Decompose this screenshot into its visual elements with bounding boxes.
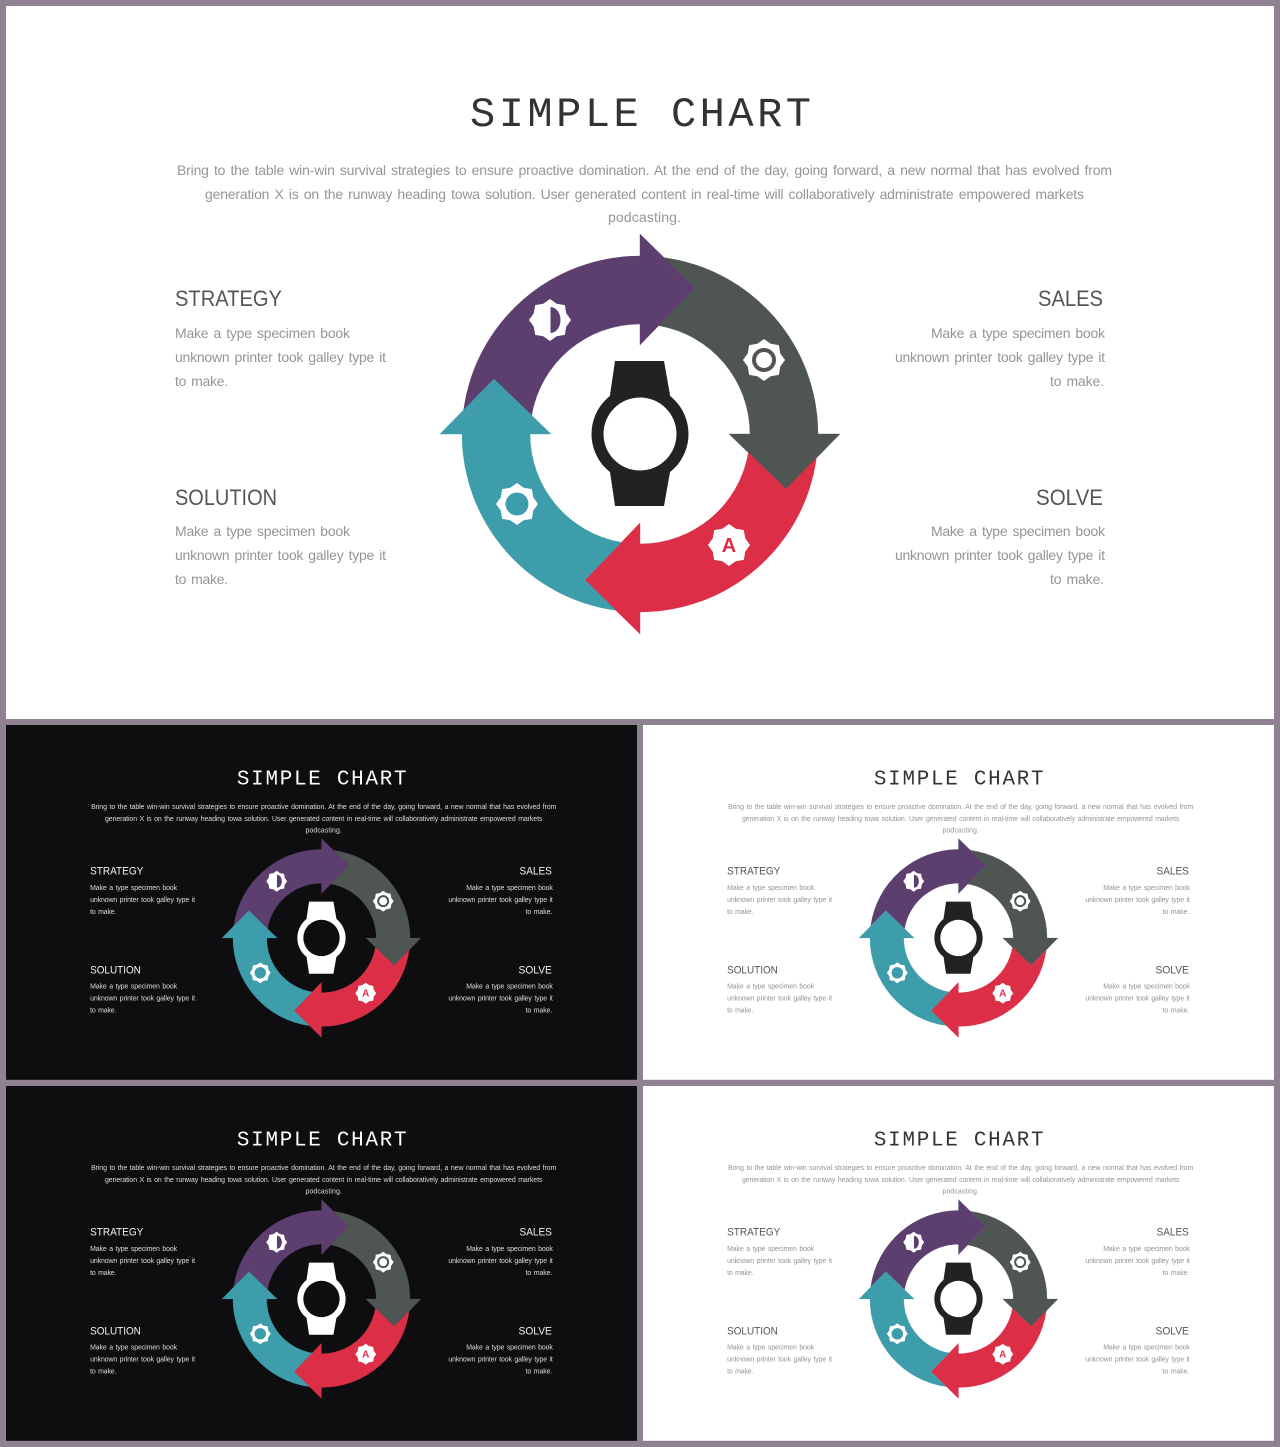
text block: solve: to make. <box>1050 571 1104 587</box>
intro paragraph: generation X is on the runway heading towa solution. User generated content in real-time will collaboratively administrate empowered markets <box>105 1177 543 1184</box>
chart: circular arrows <box>859 1199 1058 1398</box>
text block: strategy: Make a type specimen book <box>175 325 351 341</box>
chart: circular arrows <box>222 838 421 1037</box>
intro paragraph <box>728 804 1194 834</box>
text block: solve: SOLVE <box>1156 964 1189 976</box>
text block: solve <box>448 964 553 1015</box>
text block: solve <box>1085 1325 1190 1376</box>
icon: brightness auto: A <box>362 1350 369 1361</box>
intro paragraph <box>177 162 1112 225</box>
intro paragraph <box>91 1165 557 1195</box>
text block: strategy: STRATEGY <box>90 865 144 877</box>
text block: strategy: STRATEGY <box>90 1226 144 1238</box>
icon: watch <box>297 902 346 974</box>
text block: strategy <box>175 286 386 389</box>
text block: sales <box>448 865 553 916</box>
icon: brightness auto <box>355 983 376 1004</box>
text block: solve <box>1085 964 1190 1015</box>
icon: brightness auto: A <box>999 1350 1006 1361</box>
text block: solve: Make a type specimen book <box>466 984 553 991</box>
text block: solution: to make. <box>90 1369 117 1376</box>
text block: strategy <box>727 1226 832 1277</box>
text block: solve: Make a type specimen book <box>931 523 1106 539</box>
panel: small dark slide top <box>6 725 637 1080</box>
intro paragraph: podcasting. <box>943 1188 979 1195</box>
text block: sales: Make a type specimen book <box>931 325 1106 341</box>
text block: solve: SOLVE <box>519 1325 552 1337</box>
intro paragraph: podcasting. <box>306 1188 342 1195</box>
intro paragraph <box>91 804 557 834</box>
text block: solution: Make a type specimen book <box>90 1345 178 1352</box>
text block: strategy: to make. <box>727 909 754 916</box>
text block: solution: Make a type specimen book <box>727 984 815 991</box>
intro paragraph: podcasting. <box>306 827 342 834</box>
text block: solve: unknown printer took galley type it <box>448 996 553 1003</box>
text block: solution: unknown printer took galley type it <box>727 996 832 1003</box>
intro paragraph <box>728 1165 1194 1195</box>
text block: solve: unknown printer took galley type it <box>448 1357 553 1364</box>
intro paragraph: generation X is on the runway heading towa solution. User generated content in real-time will collaboratively administrate empowered markets <box>742 1177 1180 1184</box>
intro paragraph: Bring to the table win-win survival strategies to ensure proactive domination. At the end of the day, going forward, a new normal that has evolved from <box>177 162 1112 178</box>
text block: strategy: STRATEGY <box>727 1226 781 1238</box>
icon: brightness ring <box>1010 891 1031 912</box>
text block: solve: SOLVE <box>519 964 552 976</box>
text block: solution: SOLUTION <box>90 1325 141 1337</box>
text block: strategy <box>90 865 195 916</box>
text block: sales: SALES <box>1157 865 1189 877</box>
intro paragraph: generation X is on the runway heading towa solution. User generated content in real-time will collaboratively administrate empowered markets <box>742 816 1180 823</box>
intro paragraph: generation X is on the runway heading towa solution. User generated content in real-time will collaboratively administrate empowered markets <box>205 186 1084 202</box>
text block: strategy: to make. <box>727 1270 754 1277</box>
text block: solve: to make. <box>1162 1369 1189 1376</box>
text block: strategy: to make. <box>90 1270 117 1277</box>
text block: solve: unknown printer took galley type it <box>1085 1357 1190 1364</box>
text block: sales <box>1085 865 1190 916</box>
text block: solution: unknown printer took galley type it <box>90 1357 195 1364</box>
text block: solve <box>895 485 1106 587</box>
icon: brightness dot <box>250 1323 271 1344</box>
icon: brightness auto: A <box>722 535 736 557</box>
title: SIMPLE CHART <box>237 1130 407 1153</box>
text block: solution <box>175 485 386 587</box>
text block: strategy: STRATEGY <box>175 286 282 311</box>
title: SIMPLE CHART <box>874 1130 1044 1153</box>
icon: brightness half <box>529 299 571 341</box>
text block: solution: SOLUTION <box>90 964 141 976</box>
text block: solution: Make a type specimen book <box>175 523 351 539</box>
title: SIMPLE CHART <box>237 769 407 792</box>
text block: strategy: unknown printer took galley type it <box>727 897 832 904</box>
text block: strategy: Make a type specimen book <box>727 1246 815 1253</box>
text block: sales: to make. <box>1050 373 1104 389</box>
text block: sales: unknown printer took galley type it <box>448 897 553 904</box>
text block: strategy: unknown printer took galley type it <box>90 897 195 904</box>
text block: solve: SOLVE <box>1156 1325 1189 1337</box>
text block: sales: unknown printer took galley type it <box>448 1258 553 1265</box>
text block: strategy: unknown printer took galley type it <box>175 349 386 365</box>
text block: solve: Make a type specimen book <box>1103 984 1190 991</box>
text block: sales: unknown printer took galley type it <box>1085 1258 1190 1265</box>
text block: solution <box>90 964 195 1015</box>
icon: watch <box>934 902 983 974</box>
text block: solution: unknown printer took galley type it <box>175 547 386 563</box>
text block: solution: to make. <box>727 1369 754 1376</box>
panel: small white slide bottom <box>643 1086 1274 1441</box>
text block: solution: SOLUTION <box>727 964 778 976</box>
text block: solve: SOLVE <box>1036 485 1103 510</box>
text block: sales: Make a type specimen book <box>466 1246 553 1253</box>
text block: sales <box>895 286 1106 389</box>
text block: solution: to make. <box>90 1008 117 1015</box>
text block: solve: to make. <box>525 1369 552 1376</box>
text block: solution <box>727 964 832 1015</box>
text block: strategy: to make. <box>175 373 228 389</box>
title: SIMPLE CHART <box>470 91 811 139</box>
intro paragraph: podcasting. <box>608 209 681 225</box>
icon: brightness half <box>266 871 287 892</box>
icon: brightness auto <box>992 1344 1013 1365</box>
text block: sales: unknown printer took galley type it <box>895 349 1105 365</box>
text block: sales: Make a type specimen book <box>466 885 553 892</box>
text block: strategy: Make a type specimen book <box>90 1246 178 1253</box>
icon: watch <box>934 1263 983 1335</box>
text block: solve: unknown printer took galley type it <box>895 547 1105 563</box>
icon: brightness half <box>266 1232 287 1253</box>
text block: strategy: Make a type specimen book <box>727 885 815 892</box>
icon: watch <box>297 1263 346 1335</box>
panel: small dark slide bottom <box>6 1086 637 1441</box>
text block: sales: to make. <box>525 909 552 916</box>
icon: brightness ring <box>373 1252 394 1273</box>
icon: brightness auto <box>355 1344 376 1365</box>
panel: small white slide top <box>643 725 1274 1080</box>
icon: brightness half <box>903 871 924 892</box>
text block: sales <box>1085 1226 1190 1277</box>
text block: solution: SOLUTION <box>727 1325 778 1337</box>
text block: sales: to make. <box>525 1270 552 1277</box>
intro paragraph: podcasting. <box>943 827 979 834</box>
text block: strategy: unknown printer took galley type it <box>727 1258 832 1265</box>
icon: brightness dot <box>496 483 538 525</box>
text block: strategy: STRATEGY <box>727 865 781 877</box>
text block: solution: SOLUTION <box>175 485 277 510</box>
text block: sales: SALES <box>1038 286 1103 311</box>
text block: solution <box>727 1325 832 1376</box>
intro paragraph: Bring to the table win-win survival strategies to ensure proactive domination. At the end of the day, going forward, a new normal that has evolved from <box>91 804 557 811</box>
text block: sales: to make. <box>1162 1270 1189 1277</box>
text block: solution: unknown printer took galley type it <box>727 1357 832 1364</box>
icon: brightness dot <box>887 962 908 983</box>
text block: solve: unknown printer took galley type it <box>1085 996 1190 1003</box>
panel: large white slide <box>6 6 1274 719</box>
text block: solution: Make a type specimen book <box>727 1345 815 1352</box>
intro paragraph: Bring to the table win-win survival strategies to ensure proactive domination. At the end of the day, going forward, a new normal that has evolved from <box>728 1165 1194 1172</box>
icon: brightness auto: A <box>362 989 369 1000</box>
text block: sales: Make a type specimen book <box>1103 1246 1190 1253</box>
chart: circular arrows <box>440 234 840 634</box>
text block: solution: unknown printer took galley type it <box>90 996 195 1003</box>
chart: circular arrows <box>222 1199 421 1398</box>
text block: strategy <box>727 865 832 916</box>
text block: sales: SALES <box>520 865 552 877</box>
icon: brightness dot <box>250 962 271 983</box>
text block: solve: Make a type specimen book <box>1103 1345 1190 1352</box>
chart: circular arrows <box>859 838 1058 1037</box>
text block: sales: SALES <box>1157 1226 1189 1238</box>
text block: strategy <box>90 1226 195 1277</box>
text block: sales <box>448 1226 553 1277</box>
text block: solve: to make. <box>1162 1008 1189 1015</box>
icon: brightness dot <box>887 1323 908 1344</box>
icon: watch <box>592 361 688 506</box>
intro paragraph: generation X is on the runway heading towa solution. User generated content in real-time will collaboratively administrate empowered markets <box>105 816 543 823</box>
icon: brightness ring <box>743 339 785 381</box>
text block: sales: to make. <box>1162 909 1189 916</box>
text block: strategy: Make a type specimen book <box>90 885 178 892</box>
icon: brightness auto <box>992 983 1013 1004</box>
text block: sales: SALES <box>520 1226 552 1238</box>
intro paragraph: Bring to the table win-win survival strategies to ensure proactive domination. At the end of the day, going forward, a new normal that has evolved from <box>728 804 1194 811</box>
icon: brightness ring <box>373 891 394 912</box>
text block: solve <box>448 1325 553 1376</box>
icon: brightness half <box>903 1232 924 1253</box>
text block: sales: Make a type specimen book <box>1103 885 1190 892</box>
icon: brightness auto <box>708 524 750 566</box>
text block: solution: to make. <box>727 1008 754 1015</box>
icon: brightness ring <box>1010 1252 1031 1273</box>
text block: strategy: unknown printer took galley type it <box>90 1258 195 1265</box>
intro paragraph: Bring to the table win-win survival strategies to ensure proactive domination. At the end of the day, going forward, a new normal that has evolved from <box>91 1165 557 1172</box>
text block: solution: Make a type specimen book <box>90 984 178 991</box>
title: SIMPLE CHART <box>874 769 1044 792</box>
icon: brightness auto: A <box>999 989 1006 1000</box>
text block: solve: Make a type specimen book <box>466 1345 553 1352</box>
text block: solution <box>90 1325 195 1376</box>
text block: solve: to make. <box>525 1008 552 1015</box>
text block: sales: unknown printer took galley type it <box>1085 897 1190 904</box>
text block: solution: to make. <box>175 571 228 587</box>
text block: strategy: to make. <box>90 909 117 916</box>
